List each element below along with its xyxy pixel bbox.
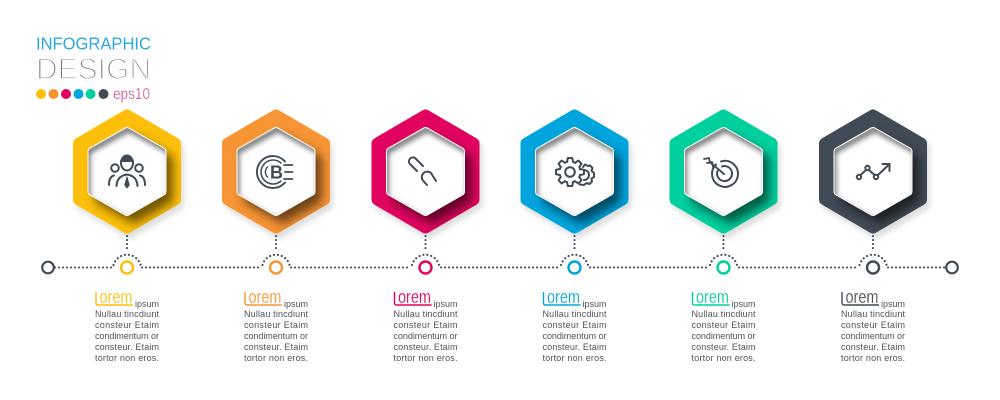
step 6 text: tortor non eros. — [841, 353, 905, 363]
step 5 text: orem — [696, 286, 729, 307]
step 3 node — [420, 262, 432, 274]
step 3 text: Nullau tincdiunt — [394, 309, 458, 319]
colour dots — [36, 89, 108, 99]
step 1 text: condimentum or — [95, 331, 159, 341]
step 3 text: tortor non eros. — [394, 353, 458, 363]
start node — [42, 262, 54, 273]
step 4 text: ipsum — [582, 299, 606, 309]
step 6 text: Nullau tincdiunt — [841, 309, 905, 319]
step 6 text: consteur Etaim — [841, 320, 905, 330]
step 5 text: tortor non eros. — [692, 353, 756, 363]
step 6 text: ipsum — [881, 299, 905, 309]
step 1 text: ipsum — [135, 299, 159, 309]
step 4 hexagon — [526, 116, 626, 232]
step 5 text: Nullau tincdiunt — [692, 309, 756, 319]
icon: gears — [556, 158, 594, 186]
step 4 text: consteur. Etaim — [542, 342, 606, 352]
step 2 text: consteur Etaim — [244, 320, 308, 330]
step 1 text: Nullau tincdiunt — [95, 309, 159, 319]
step 5 connector — [710, 236, 737, 274]
step 3 text: ipsum — [434, 299, 458, 309]
step 1 text — [95, 286, 159, 363]
step 3 text: consteur Etaim — [394, 320, 458, 330]
icon: broken link — [409, 157, 436, 185]
step 5 text: consteur. Etaim — [692, 342, 756, 352]
step 5 text: consteur Etaim — [692, 320, 756, 330]
step 1 text: tortor non eros. — [95, 353, 159, 363]
title block — [36, 34, 151, 103]
step 6 text — [841, 286, 905, 363]
step 2 text — [244, 286, 308, 363]
step 4 text — [542, 286, 607, 363]
step 2 hexagon — [228, 116, 327, 232]
step 2 node — [270, 262, 282, 274]
timeline — [42, 262, 958, 273]
step 4 text: tortor non eros. — [542, 353, 606, 363]
step 3 text: orem — [398, 286, 431, 307]
step 1 text: consteur Etaim — [95, 320, 159, 330]
eps label: eps10 — [113, 86, 150, 103]
step 4 connector — [561, 236, 588, 274]
step 3 text: consteur. Etaim — [394, 342, 458, 352]
heading: infographic: INFOGRAPHIC — [36, 34, 151, 54]
step 2 text: orem — [248, 286, 282, 307]
step 1 connector — [114, 236, 140, 274]
step 6 text: condimentum or — [841, 331, 905, 341]
step 5 text — [692, 286, 756, 363]
step 4 text: condimentum or — [542, 331, 606, 341]
step 4 text: orem — [547, 286, 580, 307]
step 1 text: consteur. Etaim — [95, 342, 159, 352]
step 1 text: orem — [100, 286, 132, 307]
step 6 hexagon — [825, 116, 924, 232]
end node — [946, 262, 958, 273]
icon: team — [109, 156, 145, 188]
step 5 node — [718, 262, 730, 274]
step 3 connector — [412, 236, 439, 274]
icon: target — [704, 158, 738, 187]
step 1 hexagon — [79, 116, 178, 232]
step 2 text: tortor non eros. — [244, 353, 308, 363]
step 6 text: consteur. Etaim — [841, 342, 905, 352]
step 2 text: ipsum — [284, 299, 308, 309]
step 2 text: condimentum or — [244, 331, 308, 341]
step 6 text: orem — [846, 286, 878, 307]
step 5 text: condimentum or — [692, 331, 756, 341]
step 6 connector — [860, 236, 886, 274]
step 3 text: condimentum or — [394, 331, 458, 341]
step 2 connector — [262, 236, 290, 274]
step 5 hexagon — [676, 116, 774, 232]
icon: trend chart — [857, 164, 890, 179]
step 3 text — [394, 286, 458, 363]
icon: bitcoin: B — [270, 162, 283, 182]
step 2 text: Nullau tincdiunt — [244, 309, 308, 319]
step 3 hexagon — [378, 116, 476, 232]
dotted line — [55, 266, 945, 269]
step 4 text: Nullau tincdiunt — [542, 309, 607, 319]
step 1 node — [121, 262, 133, 274]
step 2 text: consteur. Etaim — [244, 342, 308, 352]
heading: design: DESIGN — [36, 53, 151, 86]
step 4 text: consteur Etaim — [542, 320, 606, 330]
step 6 node — [867, 262, 879, 274]
step 4 node — [568, 262, 580, 274]
step 5 text: ipsum — [732, 299, 756, 309]
